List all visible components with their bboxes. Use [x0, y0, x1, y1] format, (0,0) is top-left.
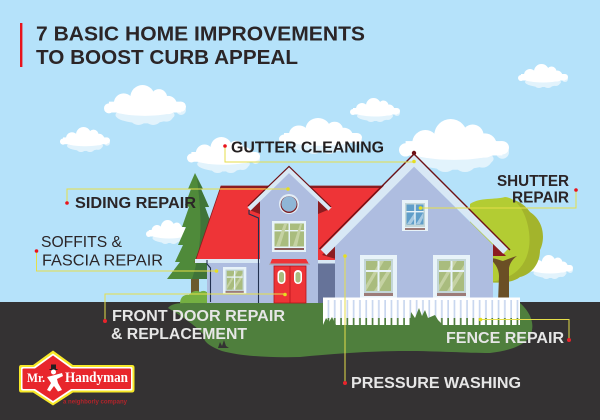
center gable bargeboard — [249, 170, 330, 209]
logo: Mr. Handyman: Handyman — [65, 370, 129, 386]
logo: Mr. Handyman — [19, 350, 134, 406]
logo: Mr. Handyman: a neighborly company — [63, 400, 128, 406]
lawn grass tufts — [218, 340, 527, 353]
main gable bargeboard — [324, 161, 506, 252]
ground — [0, 302, 600, 420]
callout: pressure washing — [343, 254, 521, 392]
lawn — [168, 303, 532, 357]
callout: pressure washing: PRESSURE WASHING — [351, 375, 521, 392]
callout: gutter cleaning: GUTTER CLEANING — [231, 140, 384, 156]
callout: shutter repair: SHUTTER — [497, 173, 569, 190]
title — [36, 24, 365, 69]
callout: gutter cleaning — [223, 140, 416, 163]
logo: Mr. Handyman: Mr. — [27, 370, 45, 385]
gable window — [402, 200, 428, 231]
round window — [279, 194, 299, 214]
left lower window — [360, 255, 397, 298]
callout: soffits and fascia repair: FASCIA REPAIR — [42, 252, 163, 270]
callout: shutter repair — [419, 173, 578, 210]
logo figure — [47, 364, 63, 392]
clouds — [60, 64, 573, 279]
title accent bar — [20, 23, 22, 67]
callout: fence repair — [446, 318, 571, 347]
callout: front door repair and replacement: & REPLACEMENT — [111, 326, 247, 343]
callout: siding repair: SIDING REPAIR — [75, 195, 196, 212]
callout: fence repair: FENCE REPAIR — [446, 330, 564, 347]
house — [195, 151, 510, 303]
main roof — [195, 186, 400, 262]
right tree — [470, 197, 543, 303]
center roof dark under eave — [249, 199, 330, 214]
right lower window — [433, 255, 470, 298]
picket fence — [323, 298, 520, 325]
main gable eave shadows — [322, 241, 506, 259]
callout: siding repair — [65, 187, 290, 212]
callout: shutter repair: REPAIR — [512, 190, 569, 206]
left wing wall — [207, 262, 260, 303]
callout: soffits and fascia repair: SOFFITS & — [41, 234, 122, 251]
side slate wall — [318, 260, 336, 303]
callout: front door repair and replacement — [103, 293, 287, 343]
main gable wall — [335, 166, 493, 303]
sky background — [0, 0, 600, 303]
callout: soffits and fascia repair — [35, 234, 218, 273]
callout: front door repair and replacement: FRONT DOOR REPAIR — [112, 308, 285, 325]
title: TO BOOST CURB APPEAL — [36, 47, 298, 69]
door awning — [270, 259, 309, 264]
bush — [180, 291, 208, 304]
title: 7 BASIC HOME IMPROVEMENTS — [36, 24, 365, 46]
upper tower window — [272, 221, 306, 252]
center tower — [260, 170, 318, 303]
left wing soffit — [195, 259, 260, 263]
downspouts — [207, 210, 258, 303]
pine tree — [167, 173, 221, 293]
left wing window — [223, 267, 246, 294]
front door — [274, 266, 306, 303]
